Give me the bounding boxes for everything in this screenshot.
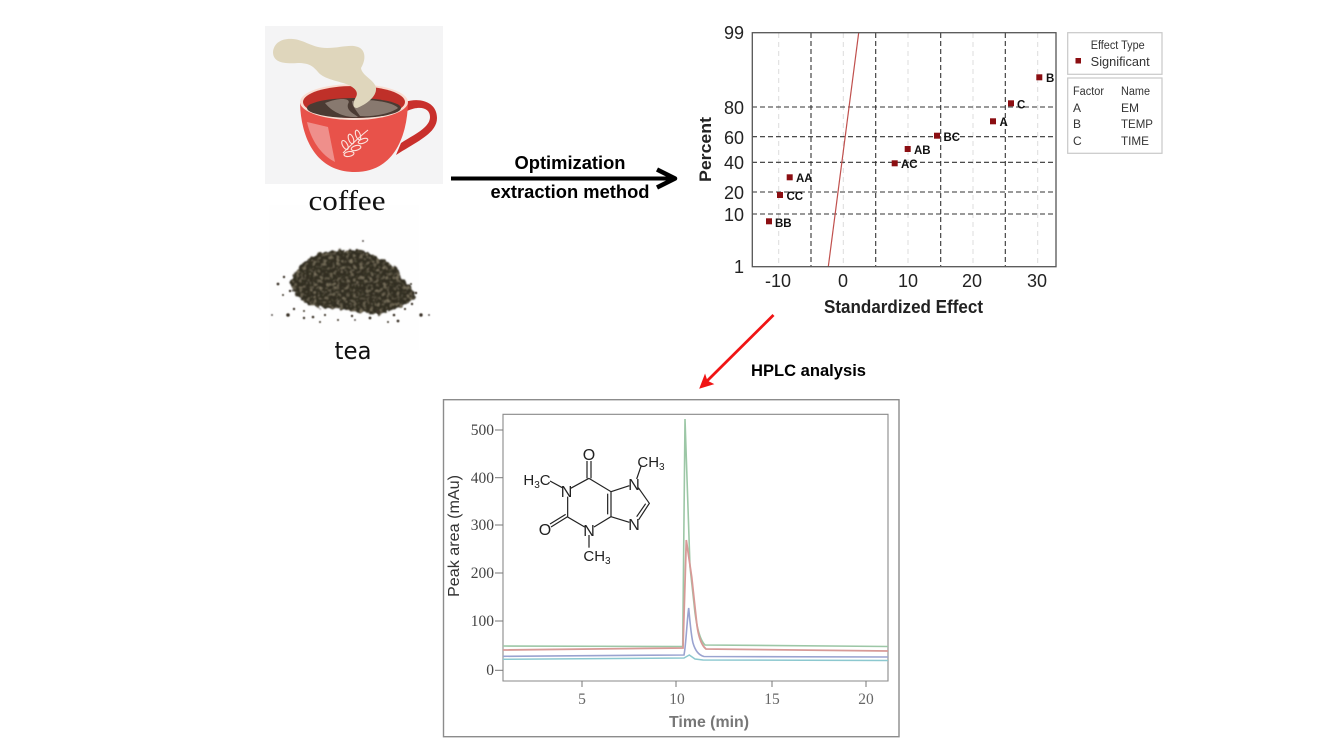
- legend: factor names: EM: [1121, 101, 1139, 115]
- chart: reference line: [828, 33, 859, 267]
- chart: x axis ticks: 10: [898, 271, 918, 291]
- chart: green trace: [503, 419, 888, 646]
- icon: caffeine molecule: N: [583, 523, 595, 540]
- chart: x axis labels: 20: [858, 691, 874, 708]
- icon: caffeine molecule: CH: [583, 548, 605, 565]
- chart: point labels: C: [1017, 100, 1025, 112]
- chart: point labels: [775, 73, 1054, 230]
- icon: caffeine molecule: 3: [659, 462, 665, 473]
- icon: coffee surface: [307, 98, 401, 118]
- icon: caffeine molecule: 3: [605, 556, 611, 567]
- icon: caffeine molecule: CH: [637, 454, 659, 471]
- chart: teal trace: [503, 655, 888, 660]
- chart: plot frame: [752, 33, 1056, 267]
- icon: caffeine molecule: 3: [534, 480, 540, 491]
- icon: caffeine molecule: C: [540, 472, 551, 489]
- icon: cup body: [300, 103, 408, 172]
- chart: x axis ticks: 20: [962, 271, 982, 291]
- legend: factor names: TEMP: [1121, 117, 1153, 131]
- chart: x axis title: Standardized Effect: [824, 297, 983, 317]
- legend: factor names: Factor: [1073, 86, 1104, 98]
- chart: y axis title: Percent: [696, 117, 715, 182]
- icon: caffeine molecule: N: [628, 517, 640, 534]
- legend: factor names: Name: [1121, 86, 1150, 98]
- arrow: optimization arrow: [451, 170, 675, 188]
- icon: cup rim: [300, 84, 408, 120]
- chart: y axis ticks: 20: [724, 183, 744, 203]
- arrow: red arrow to HPLC: [700, 315, 774, 388]
- icon: leaf decoration: [340, 130, 368, 157]
- icon: caffeine molecule: O: [583, 447, 595, 464]
- text: extraction method label: extraction method: [490, 182, 650, 202]
- chart: y axis labels: 200: [471, 565, 494, 582]
- chart: point labels: B: [1046, 73, 1054, 85]
- icon: cup interior: [303, 86, 405, 118]
- legend: factor names: TIME: [1121, 134, 1149, 148]
- chart: x axis ticks: 30: [1027, 271, 1047, 291]
- chart: axis tick marks: [495, 430, 866, 687]
- chart: point labels: CC: [786, 191, 803, 203]
- chart: chromatogram frame: [503, 414, 888, 681]
- heading: coffee label: coffee: [308, 185, 386, 217]
- icon: tea specks: [271, 240, 430, 323]
- chart: normal plot of standardized effects: [696, 23, 1056, 317]
- chart: y axis labels: 500: [471, 422, 494, 439]
- chart: x axis labels: 5: [578, 691, 586, 708]
- chart: blue trace: [503, 608, 888, 657]
- chart: point labels: BC: [944, 132, 960, 144]
- legend: effect type: [1068, 33, 1162, 74]
- chart: point labels: AC: [901, 159, 918, 171]
- legend: effect type: Effect Type: [1091, 40, 1145, 52]
- icon: cup handle: [396, 100, 437, 155]
- icon: caffeine molecule: H: [523, 472, 534, 489]
- legend: factor names: A: [1073, 101, 1081, 115]
- chart: red trace: [503, 540, 888, 651]
- chart: y axis ticks: 60: [724, 128, 744, 148]
- chart: y axis ticks: 99: [724, 23, 744, 43]
- icon: cup highlight: [307, 122, 335, 162]
- panel: tea leaves pile: [269, 205, 430, 350]
- text: HPLC analysis label: HPLC analysis: [751, 361, 866, 380]
- chart: point labels: A: [1000, 117, 1008, 129]
- icon: coffee swirl: [325, 99, 398, 117]
- panel: HPLC chromatogram: [444, 400, 899, 737]
- icon: steam: [273, 39, 376, 108]
- legend: factor names: C: [1073, 134, 1082, 148]
- icon: caffeine molecule: [523, 447, 665, 567]
- chart: y axis labels: 400: [471, 470, 494, 487]
- text: optimization label: Optimization: [514, 153, 626, 173]
- chart: y axis labels: [471, 422, 494, 679]
- chart: y axis title: Peak area (mAu): [446, 475, 463, 597]
- icon: caffeine molecule: N: [561, 484, 572, 501]
- icon: tea pile: [289, 249, 415, 314]
- chart: data points: [766, 74, 1042, 224]
- chart: point labels: BB: [775, 218, 792, 230]
- chart: y axis ticks: [724, 23, 744, 277]
- chart: x axis ticks: [765, 271, 1047, 291]
- chart: x axis ticks: -10: [765, 271, 791, 291]
- heading: tea label: tea: [334, 337, 372, 365]
- chart: y axis labels: 100: [471, 613, 494, 630]
- chart: y axis labels: 300: [471, 517, 494, 534]
- chart: y axis ticks: 40: [724, 153, 744, 173]
- chart: x axis labels: [578, 691, 874, 708]
- legend: factor names: B: [1073, 117, 1081, 131]
- chart: x axis labels: 15: [764, 691, 780, 708]
- chart: y axis ticks: 80: [724, 98, 744, 118]
- chart: x axis labels: 10: [669, 691, 685, 708]
- chart: point labels: AA: [796, 173, 813, 185]
- icon: caffeine molecule: O: [539, 522, 551, 539]
- panel: coffee illustration: [265, 26, 443, 184]
- chart: point labels: AB: [914, 145, 931, 157]
- legend: effect type: Significant: [1091, 55, 1150, 69]
- legend: factor names: [1068, 78, 1162, 153]
- chart: y axis labels: 0: [486, 662, 494, 679]
- chart: y axis ticks: 10: [724, 205, 744, 225]
- icon: caffeine molecule: N: [628, 477, 640, 494]
- chart: x axis title: Time (min): [669, 714, 749, 731]
- chart: y axis ticks: 1: [734, 257, 744, 277]
- chart: x axis ticks: 0: [838, 271, 848, 291]
